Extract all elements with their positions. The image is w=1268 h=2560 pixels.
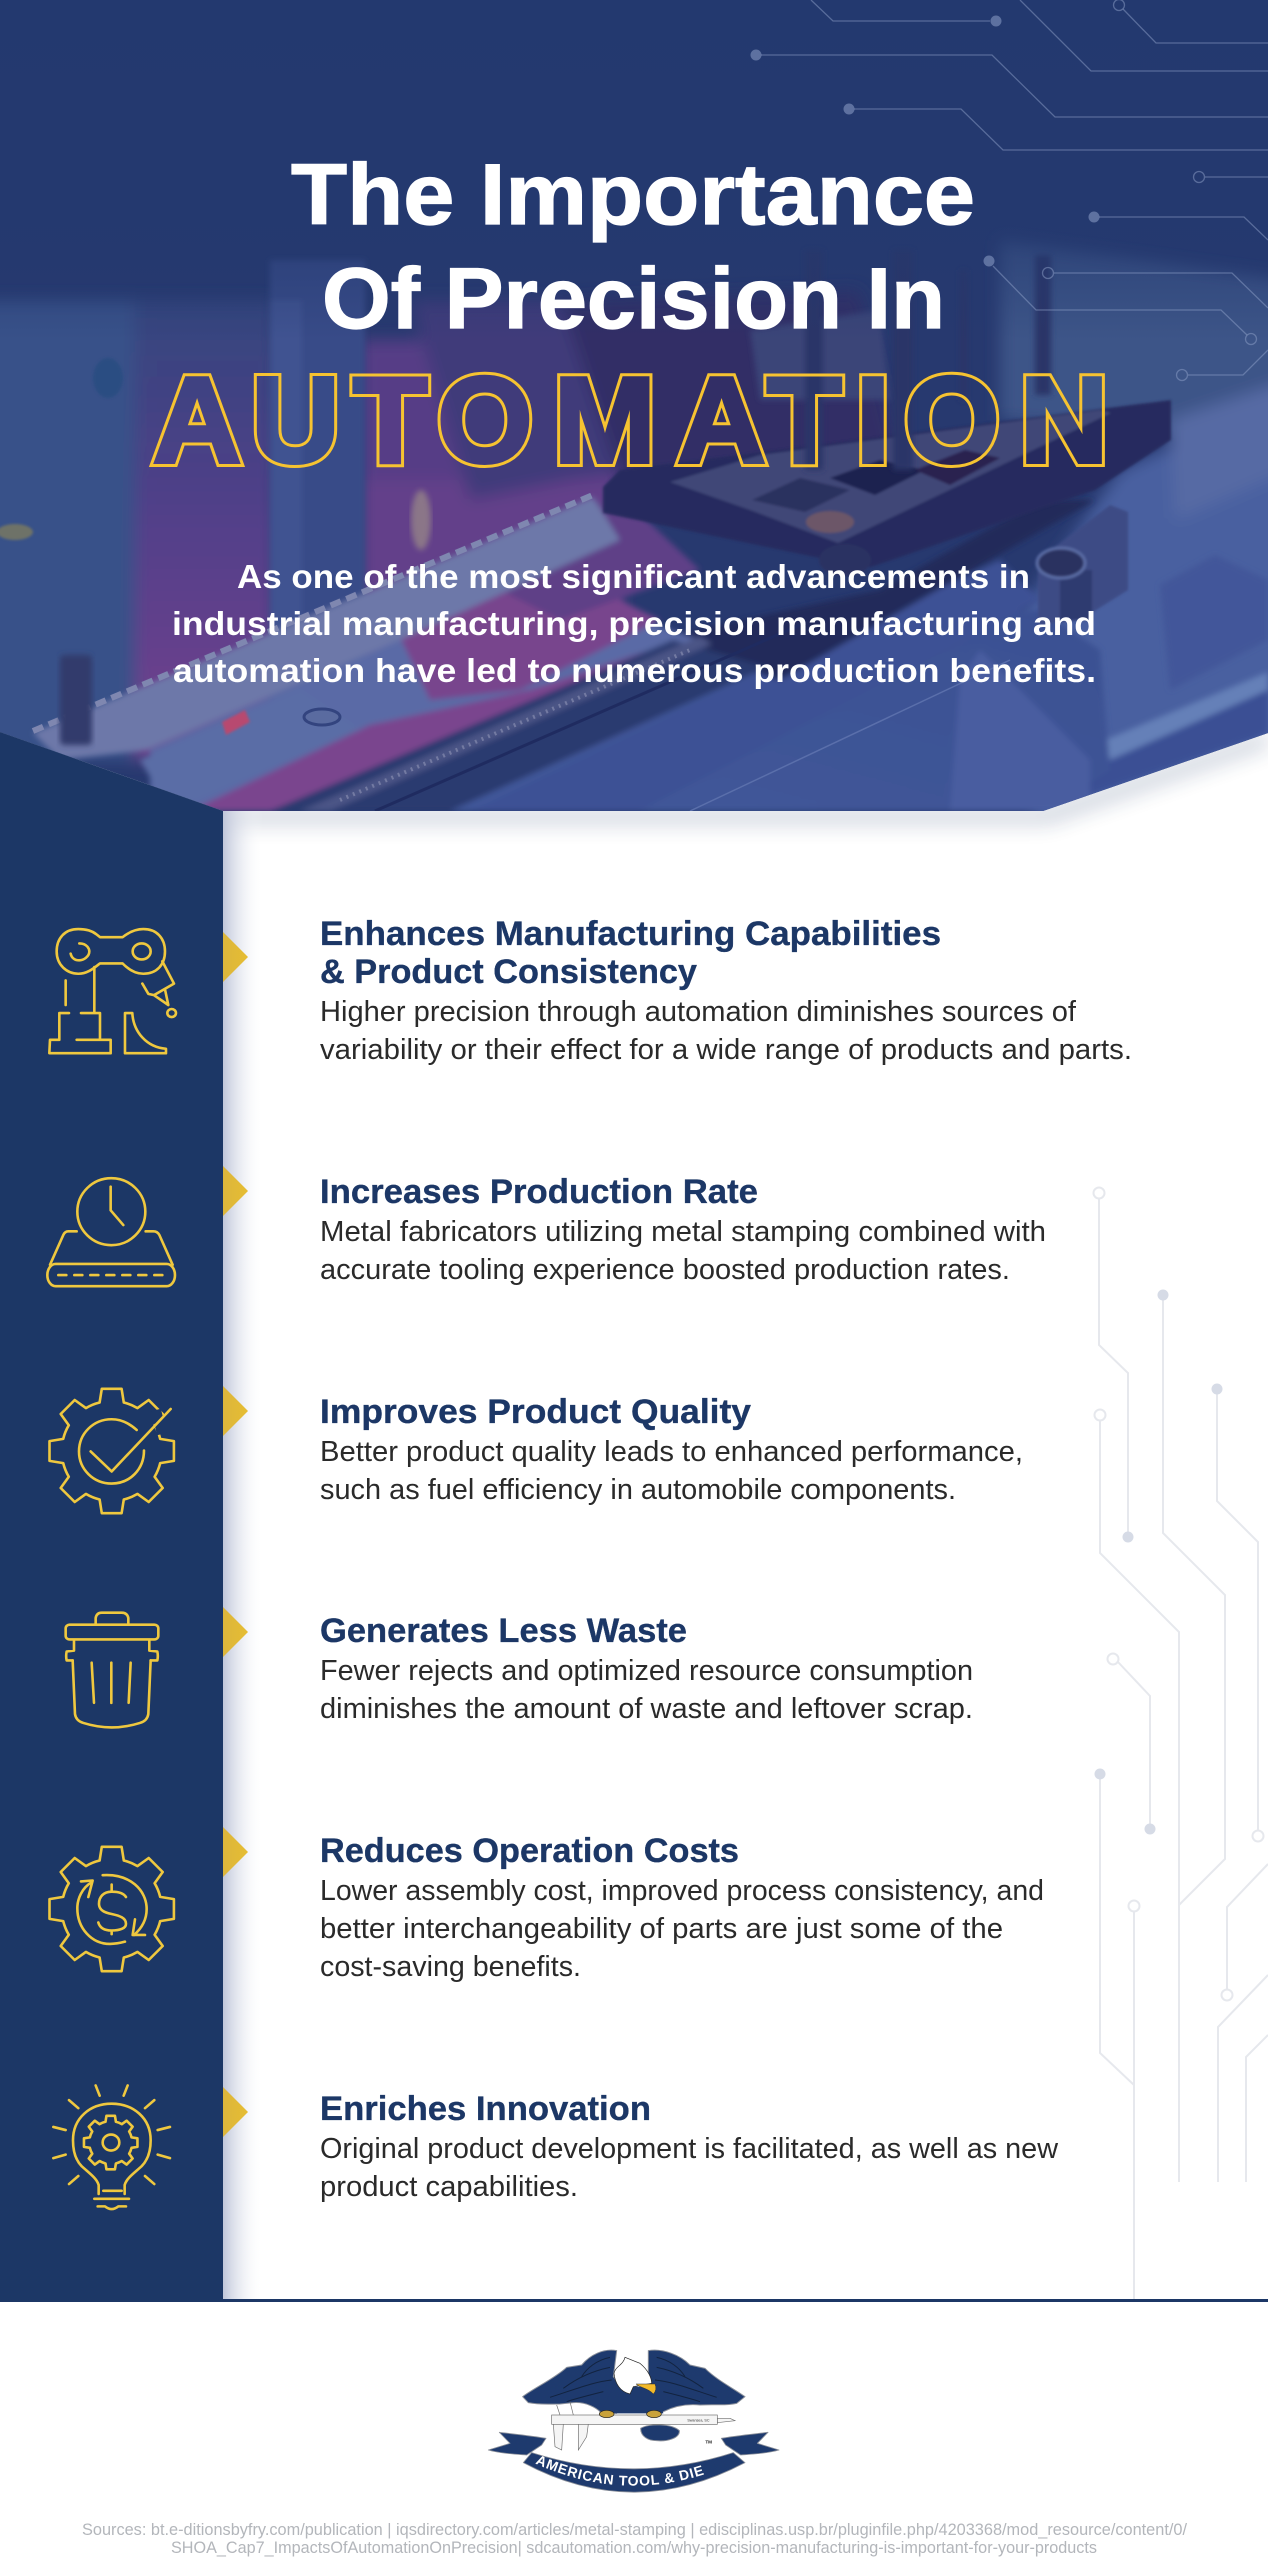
icon: robot arm [49, 929, 176, 1053]
benefit 4 text: Generates Less Waste [320, 1612, 687, 1650]
dark cylinder at lower left [60, 655, 92, 745]
benefit 5 text [320, 1832, 1044, 1983]
dark diagonal under block [650, 500, 1095, 680]
benefit 1 text [320, 915, 1132, 1066]
benefit 3 text: such as fuel efficiency in automobile components. [320, 1474, 956, 1506]
benefit 6 text [320, 2090, 1058, 2203]
nozzles [750, 250, 1051, 470]
intro text: industrial manufacturing, precision manufacturing and [172, 606, 1096, 643]
caliper: Swansea, SC [687, 2418, 710, 2422]
icon: light bulb with gear [53, 2085, 170, 2209]
title [291, 147, 975, 347]
red light [222, 710, 250, 735]
ribbon text: AMERICAN TOOL & DIE [535, 2456, 704, 2486]
benefit 6 text: product capabilities. [320, 2171, 578, 2203]
wing feathers [550, 2357, 717, 2402]
title: The Importance [291, 147, 975, 243]
benefit 6 text: Enriches Innovation [320, 2090, 651, 2128]
benefit 1 text: variability or their effect for a wide range of products and parts. [320, 1034, 1132, 1066]
caliper [552, 2402, 735, 2450]
screw on base [304, 709, 340, 725]
intro text [172, 559, 1096, 690]
yellow cable mark [0, 490, 431, 550]
benefit 1 text: & Product Consistency [320, 953, 697, 991]
icon: clock over conveyor [47, 1178, 175, 1286]
benefit 5 text: better interchangeability of parts are just some of the [320, 1913, 1003, 1945]
sources [82, 2520, 1187, 2557]
belt [33, 497, 620, 760]
rail [270, 640, 767, 811]
benefit 1 text: Enhances Manufacturing Capabilities [320, 915, 941, 953]
panel: hero photo background [0, 0, 1268, 830]
benefit 4 text [320, 1612, 973, 1725]
machine block [603, 400, 1171, 576]
intro text: automation have led to numerous production benefits. [173, 653, 1096, 690]
hero circuit lines [750, 0, 1268, 380]
benefit 4 text: Fewer rejects and optimized resource consumption [320, 1655, 973, 1687]
hole in machine wall [93, 358, 123, 398]
benefit 5 text: Lower assembly cost, improved process consistency, and [320, 1875, 1044, 1907]
logo: American Tool & Die eagle [488, 2350, 780, 2493]
clamp and cylinder [1037, 505, 1128, 625]
ribbon [488, 2432, 779, 2492]
benefit 1 text: Higher precision through automation diminishes sources of [320, 996, 1076, 1028]
shadow under hero [223, 733, 1268, 822]
big bottom plate [452, 610, 1110, 811]
top shading [272, 240, 1266, 290]
benefit 4 text: diminishes the amount of waste and leftover scrap. [320, 1693, 973, 1725]
trademark: TM [705, 2439, 712, 2444]
benefit 3 text [320, 1393, 1023, 1506]
icon: trash can [66, 1613, 158, 1727]
sources: SHOA_Cap7_ImpactsOfAutomationOnPrecision| sdcautomation.com/why-precision-manufacturing-is-important-for-your-products [171, 2538, 1097, 2557]
belt teeth [33, 495, 593, 731]
benefit 5 text: Reduces Operation Costs [320, 1832, 739, 1870]
benefit 2 text: Increases Production Rate [320, 1173, 758, 1211]
icon: gear with check [49, 1389, 174, 1513]
benefit 2 text: accurate tooling experience boosted production rates. [320, 1254, 1010, 1286]
benefit 6 text: Original product development is facilitated, as well as new [320, 2133, 1058, 2165]
sources: Sources: bt.e-ditionsbyfry.com/publication | iqsdirectory.com/articles/metal-stamping | edisciplinas.usp.br/pluginfile.php/4203368/mod_resource/content/0/ [82, 2520, 1187, 2539]
icon: gear with dollar [49, 1847, 174, 1971]
bottom rule [0, 2299, 1268, 2302]
title accent: AUTOMATION: AUTOMATION [153, 352, 1108, 488]
benefit 3 text: Better product quality leads to enhanced performance, [320, 1436, 1023, 1468]
pink under-belt platform [147, 621, 696, 806]
circuit lines on white panel [1094, 1188, 1268, 2299]
benefit 5 text: cost-saving benefits. [320, 1951, 581, 1983]
panel shadow [223, 811, 263, 2300]
arrow markers [223, 932, 248, 2137]
rail speckle [340, 650, 690, 800]
beak [636, 2384, 656, 2394]
title: Of Precision In [322, 251, 945, 347]
talons [599, 2410, 661, 2418]
benefit 2 text [320, 1173, 1046, 1286]
eagle head [614, 2357, 652, 2394]
eagle wings [523, 2350, 745, 2441]
left panel [0, 732, 223, 2300]
intro text: As one of the most significant advancements in [237, 559, 1030, 596]
benefit 3 text: Improves Product Quality [320, 1393, 751, 1431]
benefit 2 text: Metal fabricators utilizing metal stamping combined with [320, 1216, 1046, 1248]
